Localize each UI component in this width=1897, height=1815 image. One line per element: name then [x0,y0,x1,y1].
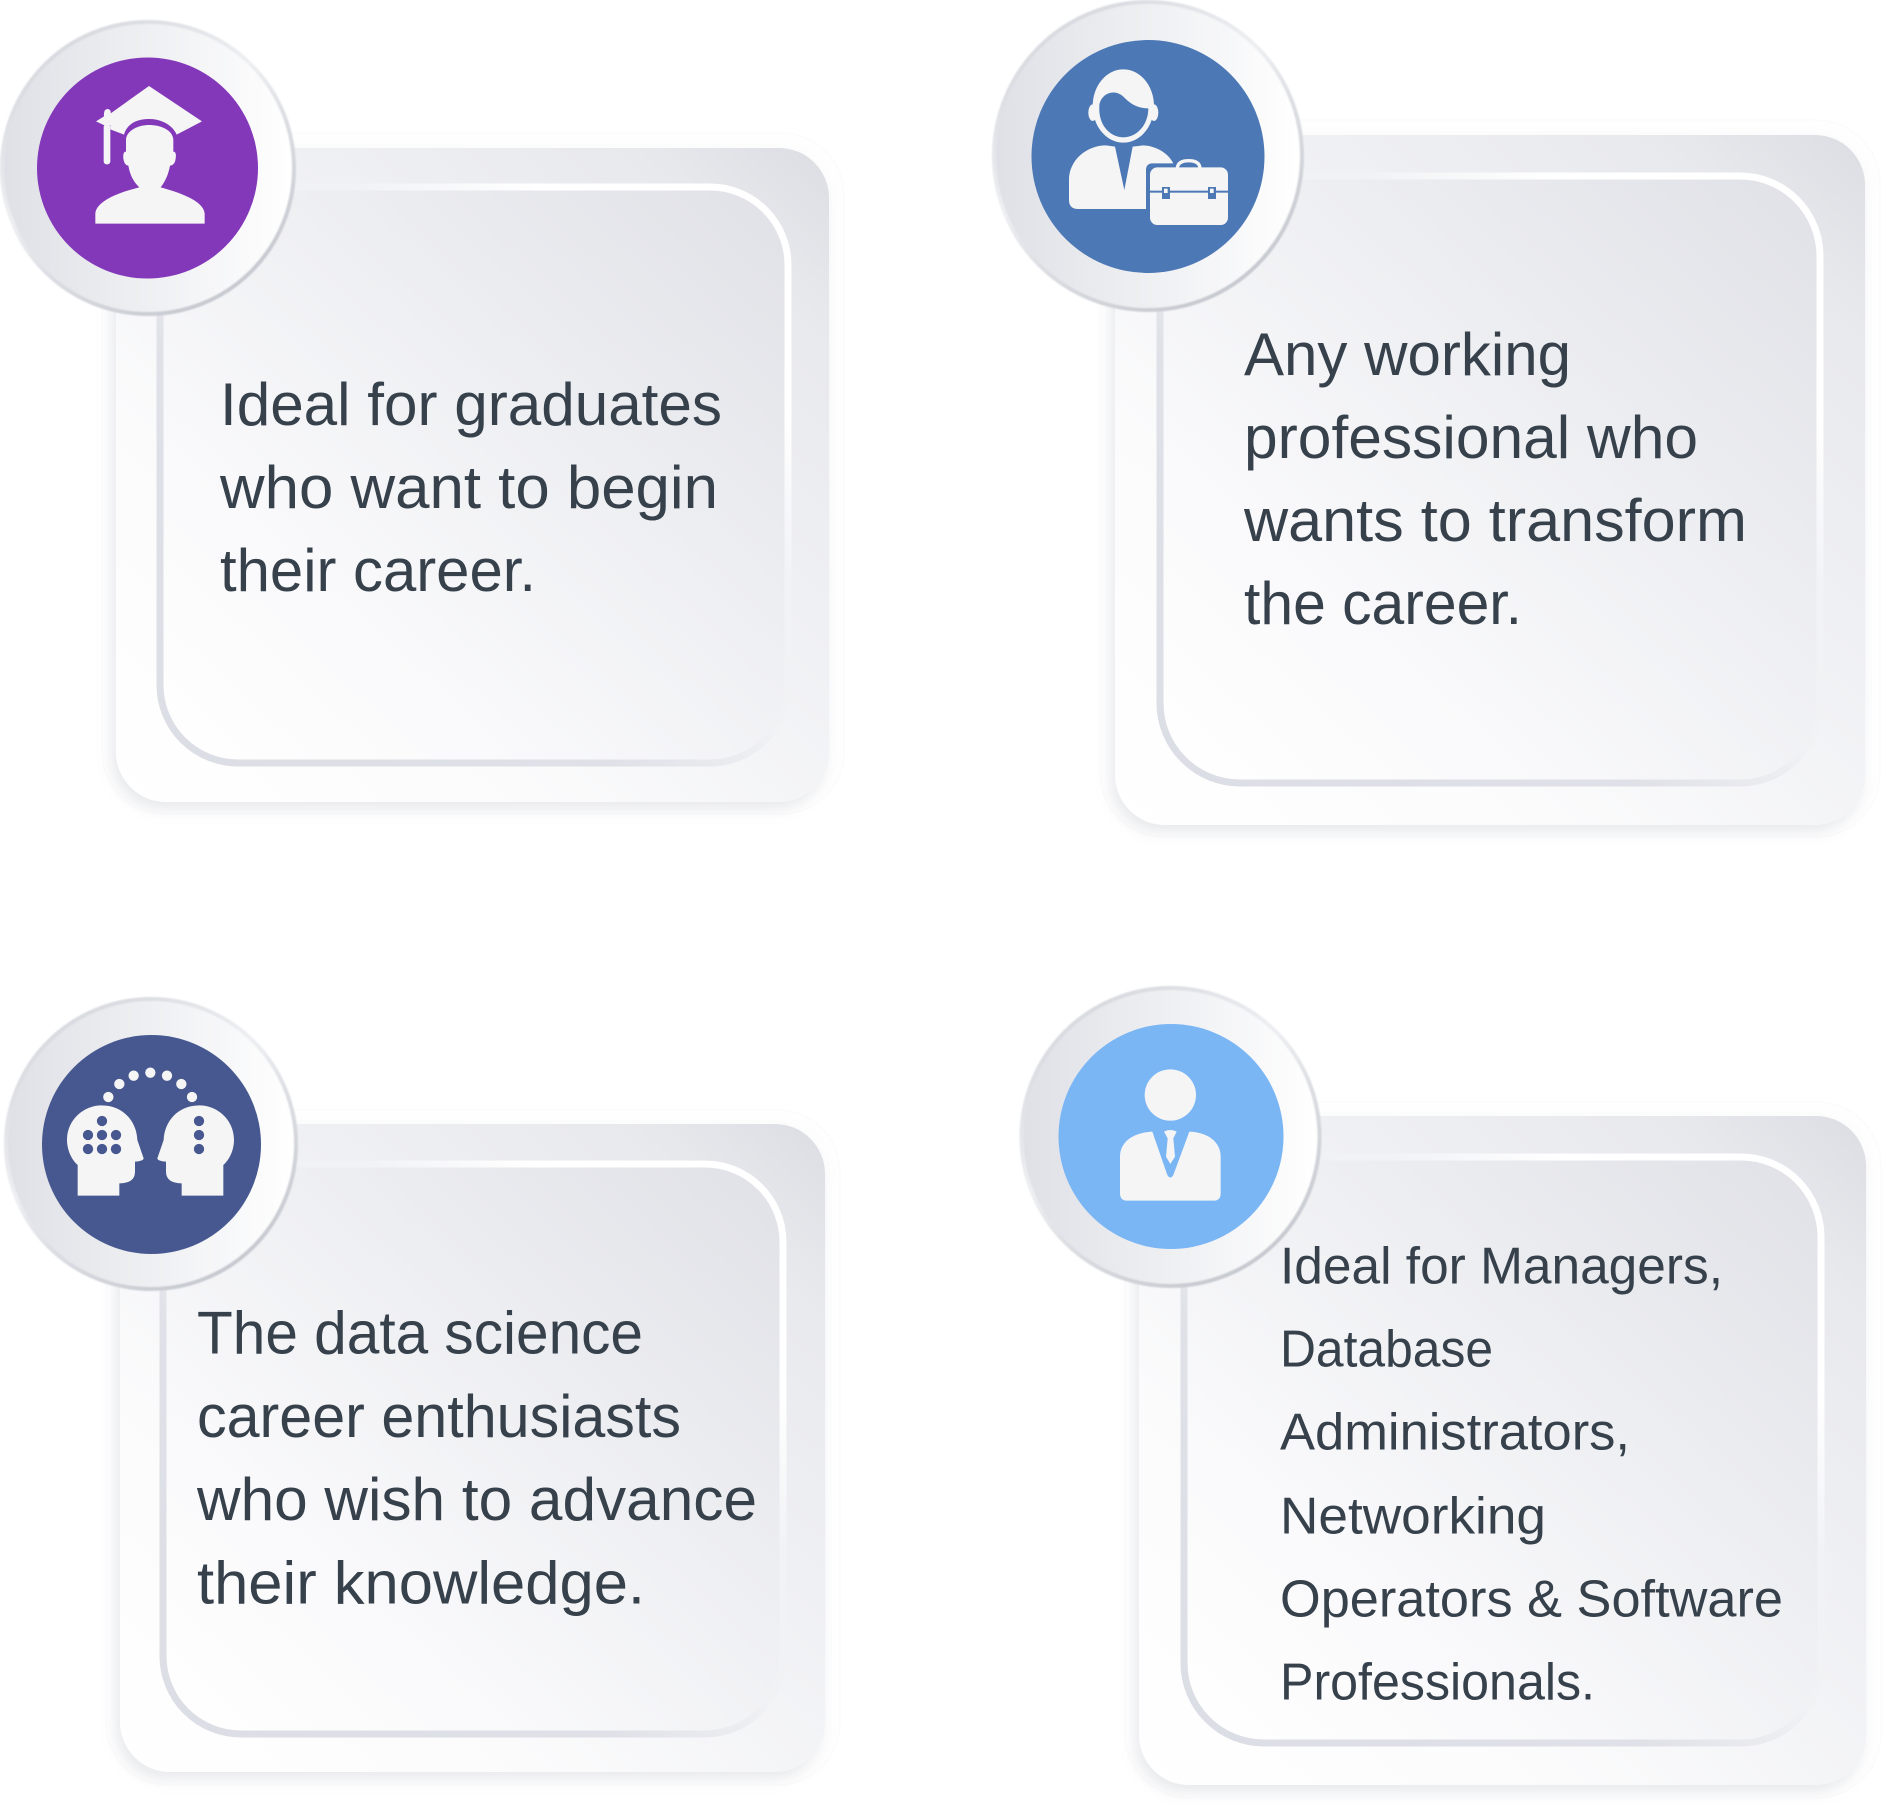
icon disc [2,22,294,314]
inner panel [163,1164,783,1734]
icon disc [6,999,296,1289]
card halo [1125,1102,1881,1798]
icon: manager with tie [1120,1069,1221,1201]
icon: blue circle [1032,40,1264,273]
icon: professional with briefcase [1069,69,1228,225]
panel: graduates [2,22,844,814]
text block: Any working [1244,321,1571,388]
inner panel [1160,176,1820,783]
text block: Database [1280,1320,1493,1378]
text block: Ideal for graduates [220,371,722,438]
text block: Administrators, [1280,1404,1630,1462]
card halo [106,1110,840,1785]
icon disc [994,2,1302,310]
icon: purple circle [37,58,258,278]
text block: wants to transform [1243,487,1747,554]
text block [1243,321,1747,637]
text block: Networking [1280,1488,1546,1546]
panel: working professional [994,2,1880,837]
text block [1280,1238,1783,1712]
icon: two heads sharing knowledge [67,1067,234,1196]
card background [1139,1116,1866,1785]
inner panel [1184,1157,1821,1743]
text block: their career. [220,537,536,604]
text block [196,1300,757,1616]
text block: who want to begin [219,454,718,521]
icon: graduate [95,86,205,224]
text block [219,371,722,604]
card background [1115,135,1865,825]
text block: Operators & Software [1280,1570,1783,1628]
text block: their knowledge. [197,1550,645,1616]
text block: Professionals. [1280,1654,1595,1712]
text block: professional who [1244,404,1698,471]
panel: managers and professionals [1022,988,1881,1798]
icon disc [1022,988,1320,1286]
text block: the career. [1244,570,1522,637]
card background [116,148,829,802]
text block: The data science [197,1300,643,1366]
card halo [102,133,844,814]
text block: Ideal for Managers, [1280,1238,1723,1296]
inner panel [160,187,788,763]
card background [120,1124,825,1772]
icon: navy circle [42,1035,261,1254]
card halo [1100,120,1880,837]
panel: data science enthusiasts [6,999,840,1785]
text block: who wish to advance [196,1466,757,1533]
icon: light blue circle [1058,1024,1284,1249]
text block: career enthusiasts [197,1383,681,1450]
